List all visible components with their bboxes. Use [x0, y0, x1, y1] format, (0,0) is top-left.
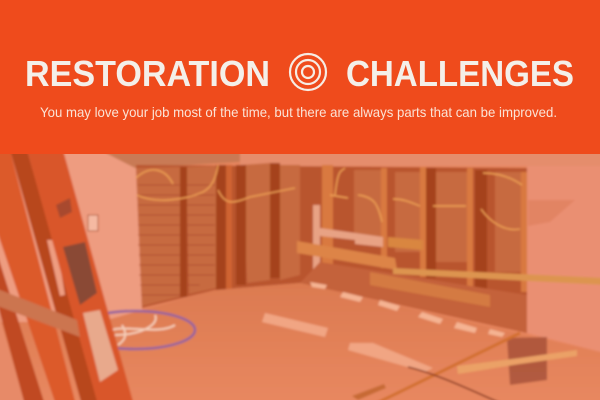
outlet — [88, 215, 98, 231]
top ceiling strip — [240, 150, 600, 166]
right wall — [527, 166, 600, 353]
panel: header band — [0, 0, 600, 154]
brick panels — [136, 163, 523, 306]
floor — [0, 283, 600, 400]
ladder labels — [63, 242, 97, 305]
light gaps at wall base — [310, 282, 505, 337]
title: restoration: RESTORATION — [25, 53, 270, 94]
subtitle: You may love your job most of the time, but there are always parts that can be improved. — [40, 104, 557, 120]
scaffold cart and rubble — [352, 333, 577, 400]
pipe — [313, 205, 383, 280]
ladder — [0, 150, 134, 400]
wires — [136, 165, 522, 230]
long board — [393, 268, 600, 285]
icon: target — [290, 54, 326, 90]
horizontal board — [297, 241, 397, 270]
coiled hose — [75, 311, 195, 349]
lower joists — [300, 262, 527, 333]
brick lines — [138, 185, 215, 295]
photo: renovation site with orange overlay — [0, 150, 600, 400]
studs — [322, 165, 527, 292]
left wall — [0, 150, 142, 322]
floor light patches — [262, 313, 328, 337]
framed wall cavity — [136, 165, 527, 333]
title: challenges: CHALLENGES — [346, 53, 574, 94]
